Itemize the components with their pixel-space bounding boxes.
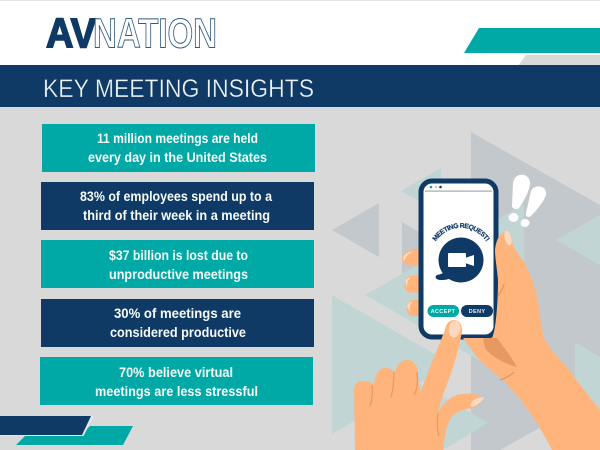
stat box 1: every day in the United States: [88, 149, 267, 165]
logo: AVNation: AV: [46, 10, 96, 56]
stat box 2: 83% of employees spend up to a: [80, 188, 272, 204]
stat box 1: 11 million meetings are held: [97, 130, 258, 146]
smartphone: [418, 178, 498, 340]
title banner: KEY MEETING INSIGHTS: [43, 75, 314, 103]
pointing hand: [354, 320, 484, 450]
curved label: MEETING REQUEST!: [432, 223, 490, 242]
bottom left ribbons: [0, 416, 133, 445]
stat box 4: [41, 299, 314, 347]
logo: AVNation: [46, 10, 217, 56]
right hand holding phone: [463, 230, 600, 450]
icon: exclamation marks: [508, 175, 546, 228]
stat box 5: [40, 357, 313, 405]
stat box 5: 70% believe virtual: [119, 364, 233, 380]
stat box 3: unproductive meetings: [109, 266, 248, 282]
background triangles: [332, 132, 600, 450]
left hand fingers behind phone: [402, 247, 422, 316]
deny button: DENY: [469, 309, 485, 315]
deny button: [461, 305, 493, 317]
accept button: [428, 305, 459, 317]
logo: AVNation: NATION: [93, 10, 217, 56]
stat box 2: third of their week in a meeting: [83, 207, 270, 223]
stat box 2: [41, 182, 314, 230]
stat box 4: considered productive: [110, 324, 246, 340]
decorative teal ribbon top right: [464, 28, 600, 53]
title banner: [0, 65, 600, 107]
decorative gray ribbon top right: [518, 55, 600, 66]
phone body: [421, 181, 496, 337]
stat box 4: 30% of meetings are: [114, 305, 241, 321]
icon: video chat bubble: [436, 238, 484, 282]
accept button: ACCEPT: [431, 309, 456, 315]
stat box 3: $37 billion is lost due to: [109, 247, 248, 263]
stat box 3: [41, 240, 314, 288]
stat box 1: [42, 124, 315, 172]
stat box 5: meetings are less stressful: [95, 383, 258, 399]
header background: [0, 0, 600, 65]
status bar: [425, 186, 492, 192]
